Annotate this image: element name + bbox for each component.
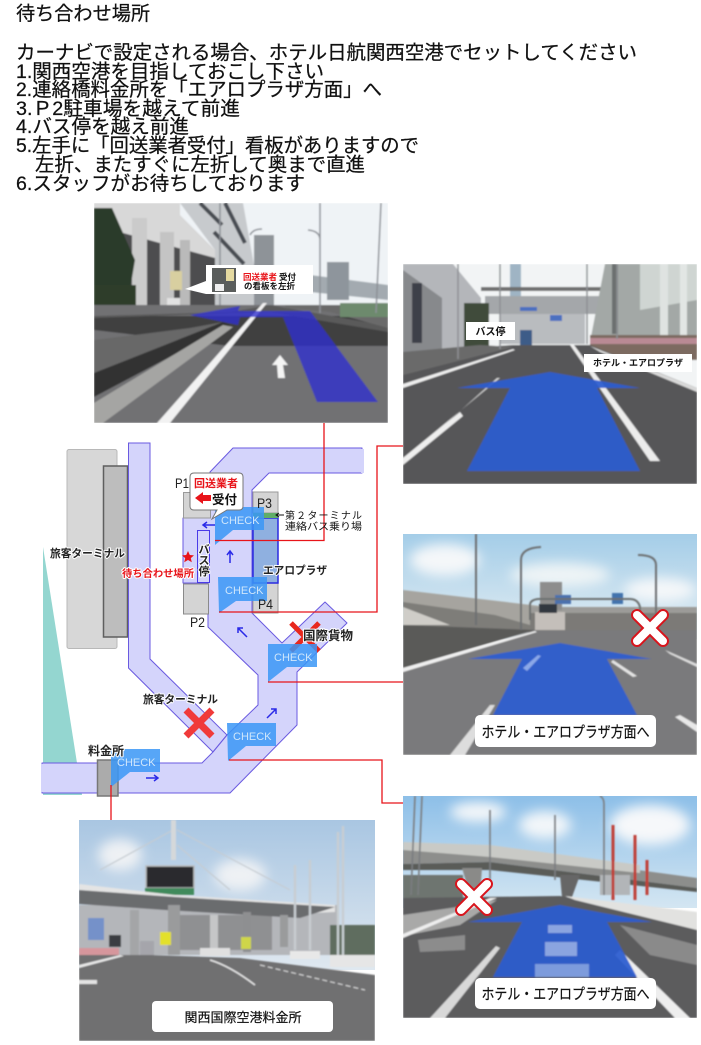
label: hotel aeroplaza: ホテル・エアロプラザ — [593, 358, 683, 368]
label: toward hotel aeroplaza: ホテル・エアロプラザ方面へ — [482, 724, 650, 741]
icon: wrong way cross — [461, 884, 487, 910]
road: toll gate route — [42, 448, 362, 793]
label: toward hotel aeroplaza: ホテル・エアロプラザ方面へ — [482, 986, 650, 1003]
toll booth — [98, 760, 118, 796]
callout: forwarding agent reception: 受付 — [212, 492, 238, 507]
bus platform — [253, 513, 278, 518]
label: P2: P2 — [190, 614, 205, 630]
instruction 4: 4.バス停を越え前進 — [16, 116, 189, 138]
check callout 4 — [227, 723, 276, 761]
label: toward hotel aeroplaza — [475, 978, 656, 1009]
label: P1: P1 — [175, 475, 189, 491]
callout: turn left at the sign: 回送業者受付 — [243, 272, 297, 282]
sea — [43, 547, 82, 795]
parking P1 — [184, 492, 210, 518]
label: bus stop: ス — [198, 555, 210, 567]
cross: international cargo closed — [291, 623, 319, 651]
label: meeting point: 待ち合わせ場所 — [122, 567, 194, 580]
check callout 1: CHECK — [221, 515, 260, 527]
label: second terminal bus stop — [276, 509, 362, 533]
check callout 1 — [215, 507, 264, 545]
label: passenger terminal junction: 旅客ターミナル — [143, 692, 218, 706]
label: bus stop — [198, 543, 210, 578]
callout: forwarding agent reception — [190, 473, 243, 519]
check callout 4: CHECK — [233, 731, 272, 743]
instruction 1: 1.関西空港を目指しておこし下さい — [16, 61, 324, 83]
check callout 3: CHECK — [274, 652, 313, 664]
road: passenger terminal approach — [128, 443, 227, 752]
label: Kansai airport toll gate — [152, 1001, 333, 1032]
label: Kansai airport toll gate: 関西国際空港料金所 — [184, 1010, 302, 1025]
terminal inner block — [104, 466, 128, 637]
red guide lines — [111, 423, 403, 820]
photo: toward hotel and aeroplaza, second junction — [403, 796, 697, 1018]
label: passenger terminal: 旅客ターミナル — [50, 546, 125, 560]
road fade edge — [361, 449, 364, 473]
label: second terminal bus stop: 連絡バス乗り場 — [285, 520, 362, 533]
label: bus stop: 停 — [198, 564, 210, 578]
label: bus stop: バス停 — [476, 325, 506, 338]
callout: turn left at the sign — [185, 265, 313, 294]
label: toward hotel aeroplaza — [475, 715, 656, 747]
icon: meeting point star — [182, 551, 194, 562]
label: second terminal bus stop: 第２ターミナル — [285, 509, 362, 522]
label: P4: P4 — [258, 596, 273, 612]
title: 待ち合わせ場所 — [16, 3, 150, 25]
check callout 2: CHECK — [225, 585, 264, 597]
bus stop island — [198, 530, 210, 582]
label: bus stop — [466, 322, 515, 340]
label: bus stop: バ — [198, 543, 210, 556]
photo: sign to turn left — [94, 203, 388, 423]
check callout 5 — [111, 749, 160, 787]
icon: wrong way cross — [637, 615, 663, 641]
aeroplaza block — [253, 518, 278, 583]
instruction 3: 3.Ｐ2駐車場を越えて前進 — [16, 98, 240, 120]
callout: forwarding agent reception: 回送業者 — [194, 476, 238, 490]
label: international cargo: 国際貨物 — [303, 628, 354, 643]
label: toll gate: 料金所 — [88, 743, 124, 758]
photo: toward hotel and aeroplaza, wrong way crossed — [403, 534, 697, 755]
instruction 6: 6.スタッフがお待ちしております — [16, 173, 305, 195]
cross: passenger terminal closed — [186, 710, 212, 736]
label: hotel aeroplaza — [584, 354, 692, 372]
photo: hotel and aeroplaza straight ahead — [403, 264, 697, 484]
terminal building — [67, 450, 117, 648]
parking P4 — [253, 583, 278, 613]
instruction 5 continued: 左折、またすぐに左折して奥まで直進 — [35, 154, 365, 176]
photo: toll gate — [79, 820, 375, 1041]
parking P3 — [253, 492, 278, 513]
map — [41, 423, 403, 820]
direction arrows — [146, 522, 276, 781]
left road end — [41, 764, 44, 792]
label: P3: P3 — [257, 495, 272, 511]
instruction 5: 5.左手に「回送業者受付」看板がありますので — [16, 135, 419, 157]
instruction 2: 2.連絡橋料金所を「エアロプラザ方面」へ — [16, 79, 382, 101]
check callout 3 — [268, 644, 317, 682]
check callout 5: CHECK — [117, 757, 156, 769]
callout: turn left at the sign: の看板を左折 — [244, 281, 296, 291]
check callout 2 — [218, 577, 267, 613]
heading and instructions — [16, 3, 637, 195]
instruction: car navigation: カーナビで設定される場合、ホテル日航関西空港でセットしてください — [16, 42, 637, 64]
parking P2 — [184, 584, 208, 614]
label: aeroplaza: エアロプラザ — [263, 564, 327, 577]
